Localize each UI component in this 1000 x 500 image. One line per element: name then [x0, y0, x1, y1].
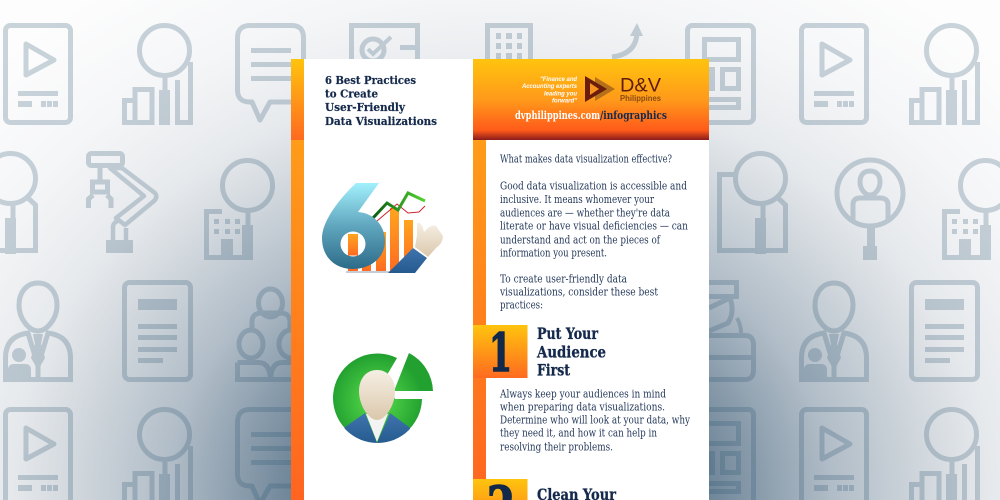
icon: play document, bottom left — [6, 410, 70, 500]
title: 6 Best Practices — [325, 73, 416, 87]
paragraph: put your audience first: they need it, and how it can help in — [500, 426, 657, 440]
intro text: practices: — [500, 298, 543, 312]
icon: growth arrow — [612, 23, 643, 57]
intro text: Good data visualization is accessible and — [500, 178, 687, 192]
logo mark — [585, 76, 615, 102]
icon: business person, left — [6, 283, 70, 382]
infographic page — [291, 59, 709, 500]
icon: magnifier chart, bottom left — [124, 410, 190, 500]
tagline: leading you — [544, 90, 577, 98]
icon: magnifier chart, top right — [912, 26, 978, 125]
tagline: "Finance and — [540, 76, 578, 83]
number badge 1: 1 — [489, 323, 512, 384]
heading: put your audience first: Put Your — [537, 324, 598, 343]
logo wordmark — [620, 78, 661, 102]
title: Data Visualizations — [325, 114, 437, 128]
title: User-Friendly — [325, 100, 405, 114]
icon: person in magnifier — [837, 160, 903, 260]
logo wordmark: Philippines — [620, 94, 662, 103]
intro text: inclusive. It means whomever your — [500, 192, 654, 206]
heading: put your audience first: Audience — [536, 342, 606, 362]
heading: put your audience first: First — [537, 360, 570, 380]
header band: logo and url — [473, 59, 709, 140]
icon: group of people — [238, 289, 305, 380]
icon: text document, right — [912, 282, 978, 380]
intro text: literate or have visual deficiencies — can — [500, 218, 688, 232]
paragraph: put your audience first: when preparing data visualizations. — [500, 400, 665, 414]
icon: number six with bar chart and thumbs up — [322, 183, 443, 273]
icon: robot arm — [88, 154, 156, 253]
paragraph: put your audience first: Determine who will look at your data, why — [500, 412, 690, 426]
icon: business person, right — [802, 283, 866, 382]
paragraph: put your audience first: resolving their problems. — [500, 440, 613, 454]
title — [325, 73, 437, 128]
logo wordmark: D&V — [620, 76, 661, 96]
tagline: Accounting experts — [521, 83, 577, 90]
intro text: What makes data visualization effective? — [500, 152, 672, 166]
intro text: understand and act on the pieces of — [500, 232, 661, 246]
intro text: audiences are — whether they're data — [500, 206, 670, 220]
number badge 1 — [473, 323, 528, 384]
title: to Create — [325, 86, 378, 100]
url: dvphilippines.com — [515, 109, 600, 122]
icon: page layout, top — [688, 26, 754, 122]
url: /infographics — [600, 109, 667, 122]
icon: document magnifier, right — [720, 154, 786, 254]
left accent strip — [291, 59, 304, 500]
paragraph: put your audience first — [499, 386, 690, 454]
intro text: information you present. — [500, 246, 607, 260]
right column strip — [473, 140, 486, 500]
icon: magnifier chart, top left — [124, 26, 190, 125]
icon: magnifier chart, bottom right — [912, 410, 978, 500]
icon: building magnifier, right — [944, 160, 1000, 260]
icon: play document, top right — [802, 26, 866, 122]
icon: document magnifier, left — [0, 154, 36, 254]
heading: put your audience first — [536, 324, 606, 380]
icon: office building — [488, 26, 530, 59]
url — [515, 110, 667, 122]
number badge 2 — [473, 476, 528, 500]
intro text: To create user-friendly data — [500, 272, 627, 286]
intro text — [499, 152, 688, 312]
icon: play document, top left — [6, 26, 70, 122]
icon: building magnifier, left — [206, 160, 272, 260]
icon: text document, left — [124, 282, 190, 380]
icon: play document, bottom right — [802, 410, 866, 500]
tagline — [522, 76, 578, 102]
icon: page layout, bottom — [709, 407, 756, 500]
icon: speech bubble, bottom — [235, 407, 291, 500]
intro text: visualizations, consider these best — [499, 284, 658, 298]
icon: speech bubble, top — [238, 26, 304, 120]
icon: person with pie chart — [333, 353, 433, 445]
paragraph: put your audience first: Always keep your audiences in mind — [499, 386, 666, 400]
tagline: forward" — [552, 98, 578, 104]
icon: person at desk — [700, 282, 754, 380]
icon: checklist card — [352, 26, 420, 61]
